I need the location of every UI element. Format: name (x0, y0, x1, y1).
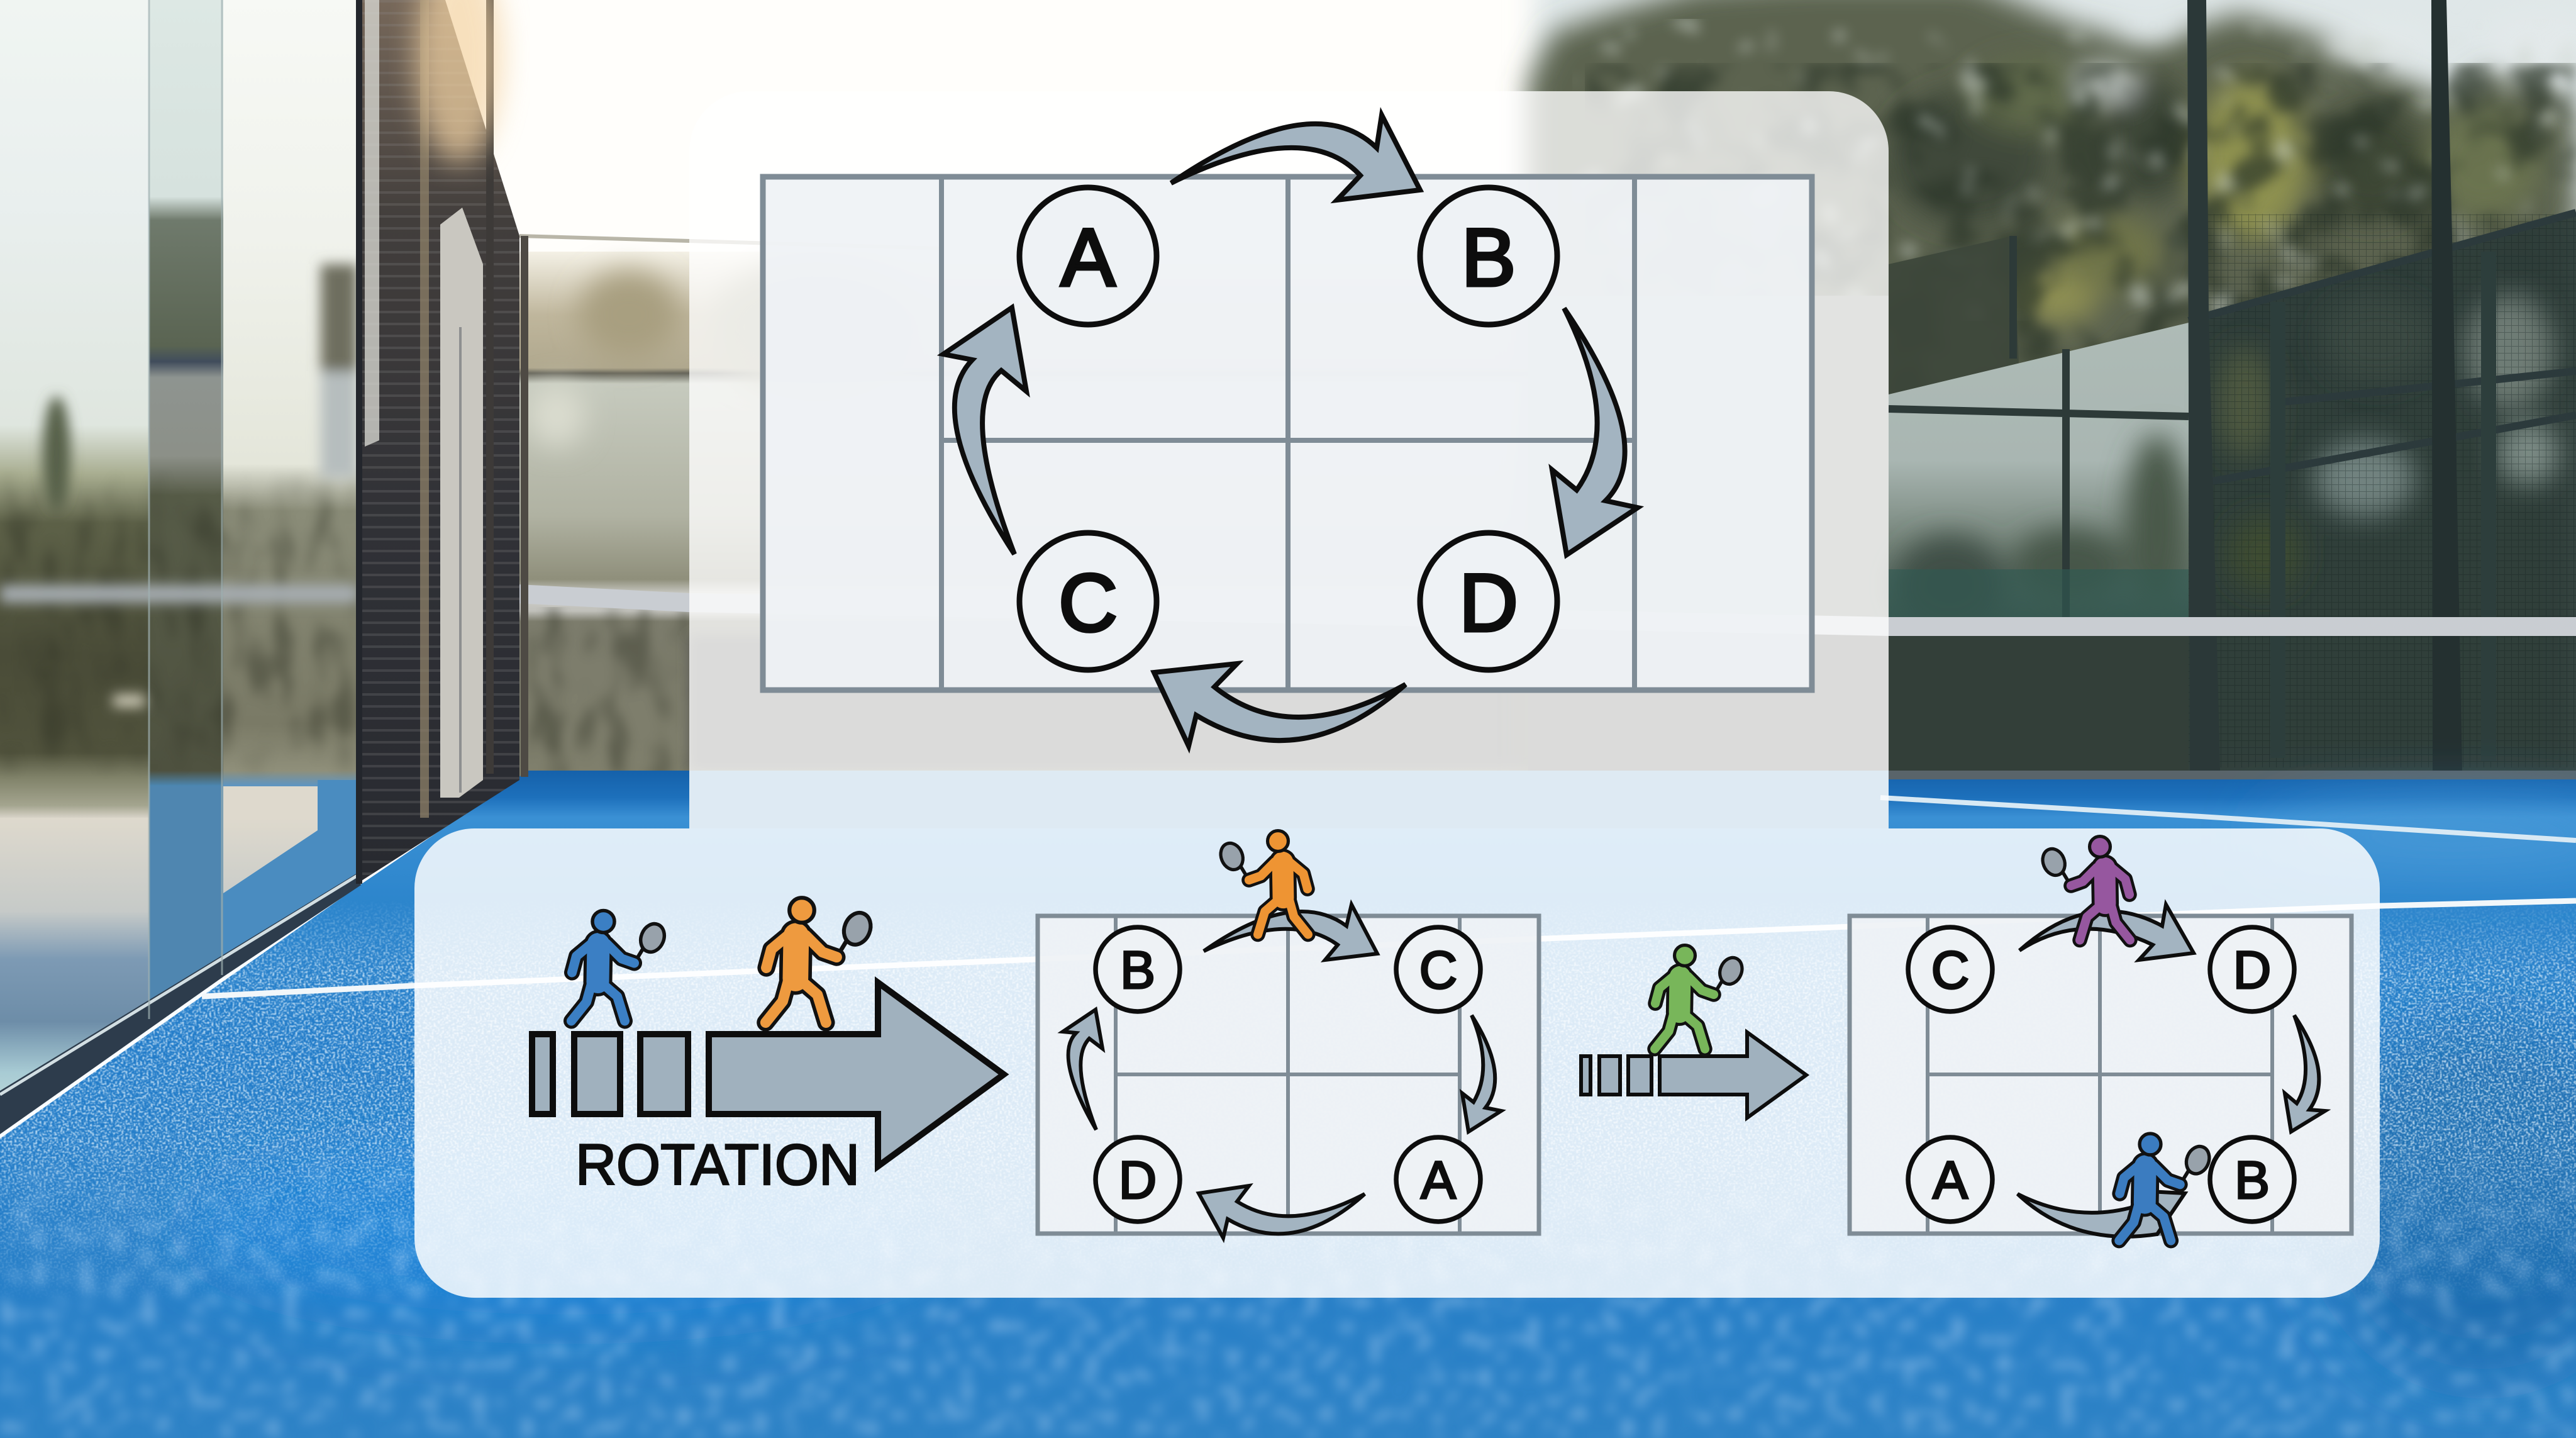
right fence (2189, 213, 2576, 771)
glass base strip (0, 873, 361, 1134)
court lines (1116, 916, 1460, 1234)
glass edges (149, 0, 222, 1019)
position A (1908, 1137, 1992, 1222)
lower fence washed (1528, 629, 1889, 771)
right tree mass (1528, 0, 2576, 780)
far net band (469, 591, 2576, 627)
player: orange on rotation arrow (765, 898, 875, 1023)
position D: D (1119, 1151, 1157, 1210)
position A (1396, 1137, 1480, 1222)
position B: B (1462, 211, 1516, 303)
far net and trees behind wall (519, 252, 1589, 780)
dark slatted wall (358, 0, 519, 881)
fence bright patches (2217, 296, 2560, 591)
position B: B (2235, 1151, 2270, 1210)
arrow: A to B (1171, 115, 1420, 200)
position D: D (1459, 557, 1518, 649)
position C: C (1931, 940, 1969, 1000)
label: rotation: ROTATION (575, 1133, 860, 1197)
arrow: C to A (1462, 1015, 1501, 1132)
player: green on small arrow (1655, 945, 1746, 1049)
position A: A (1421, 1151, 1456, 1210)
rails and posts (2189, 213, 2576, 484)
position D (1096, 1137, 1180, 1222)
reflected trees mottling (0, 465, 356, 780)
right sky (1535, 0, 2576, 390)
reflected trees in glass (1893, 434, 2189, 635)
small rotation arrow group (1581, 1032, 1806, 1118)
reflected details on glass (0, 264, 358, 706)
player: blue on third court (2119, 1134, 2213, 1240)
left glass B (149, 0, 223, 786)
sky (0, 0, 2576, 793)
glass frame bars (1889, 236, 2189, 629)
dark band behind top panel (689, 635, 1570, 771)
court outline (763, 177, 1812, 690)
position C: C (1058, 557, 1118, 649)
wall slats (358, 0, 519, 881)
court lines (941, 177, 1635, 690)
position C (1908, 927, 1992, 1012)
player: purple on third court (2039, 837, 2130, 940)
far dark post (486, 0, 494, 774)
arrow: D to B (2285, 1015, 2325, 1132)
glass base highlight (0, 876, 357, 1095)
second court diagram (1038, 905, 1539, 1238)
sun glow (415, 0, 503, 164)
small arrow (1660, 1032, 1806, 1118)
left glass C (223, 0, 358, 786)
segment 3 (640, 1034, 688, 1114)
far fence post (521, 236, 528, 777)
soft turf shading (189, 811, 2576, 1371)
position C (1019, 533, 1157, 670)
floor behind top panel (689, 771, 1889, 828)
white slat strip (365, 0, 379, 447)
large arrow (709, 983, 1004, 1166)
segment 1 (1581, 1056, 1591, 1095)
tan post on wall (420, 0, 429, 818)
right court base shadow (1889, 771, 2576, 779)
segment 2 (574, 1034, 620, 1114)
position B (1420, 187, 1557, 325)
position A (1019, 187, 1157, 325)
arrow: D to C (1154, 664, 1406, 746)
main court diagram (763, 115, 1812, 746)
position D (1420, 533, 1557, 670)
tree highlights (1887, 3, 2576, 324)
mesh overlay (2189, 214, 2576, 767)
turf speckle fine (0, 900, 2576, 1302)
position D: D (2233, 940, 2271, 1000)
court outline (1038, 916, 1539, 1234)
glass lower part (0, 786, 358, 1095)
position D (2210, 927, 2294, 1012)
player: orange on second court (1217, 831, 1308, 935)
arrow: A to B (2018, 1191, 2185, 1237)
arrow: C to A (943, 308, 1026, 554)
arrow: C to D (2019, 905, 2194, 960)
turf base (0, 771, 2576, 1438)
arrow: B to D (1552, 308, 1638, 555)
player: blue on rotation arrow (571, 911, 669, 1021)
pillar shadow (459, 327, 462, 793)
arrow: A to D (1199, 1186, 1365, 1238)
upper horizontal rail (519, 236, 943, 248)
arrow: D to B (1063, 1010, 1102, 1130)
green windscreen (1889, 569, 2189, 620)
mottled net area left (528, 607, 689, 777)
tree sky holes (1572, 19, 2576, 321)
blue reflected pillar (149, 786, 223, 1022)
position B: B (1120, 940, 1155, 1000)
court lines (202, 901, 2576, 996)
third court diagram (1850, 905, 2351, 1237)
panel: top translucent panel (689, 91, 1889, 828)
tree dark mottling (1585, 63, 2576, 415)
position B (2210, 1137, 2294, 1222)
washed fence behind top panel (1528, 296, 1889, 635)
panel: bottom translucent panel (414, 828, 2380, 1298)
arrow: B to C (1204, 905, 1377, 960)
rotation arrow group (532, 983, 1004, 1197)
lower fence (1889, 629, 2189, 771)
position B (1096, 927, 1180, 1012)
position A: A (1061, 211, 1116, 303)
court outline (1850, 916, 2351, 1234)
position A: A (1933, 1151, 1968, 1210)
glass panels (1889, 323, 2189, 629)
segment 2 (1599, 1056, 1620, 1095)
blurred trees (528, 258, 924, 447)
segment 1 (532, 1034, 553, 1114)
position C (1396, 927, 1480, 1012)
position C: C (1419, 940, 1457, 1000)
turf speckle bokeh (0, 1120, 2576, 1438)
left glass A (0, 0, 149, 818)
wall edge post (356, 0, 362, 884)
upper mesh between rails (1889, 236, 2019, 394)
segment 3 (1628, 1056, 1652, 1095)
white pillar (440, 208, 483, 798)
blue reflected patch (223, 780, 358, 956)
court lines (1928, 916, 2272, 1234)
